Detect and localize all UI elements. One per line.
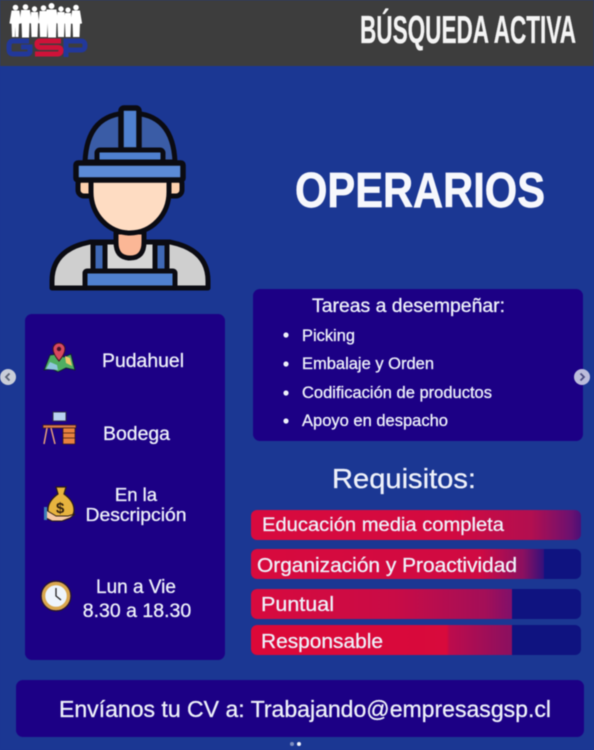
chart: requirement bars	[251, 510, 581, 655]
worker neck	[116, 232, 144, 258]
title: operarios: OPERARIOS	[295, 164, 545, 218]
bar: responsable: Responsable	[261, 631, 383, 653]
icon: money bag: $	[56, 500, 65, 517]
bar: organización	[251, 549, 581, 579]
logo letter S	[35, 41, 61, 54]
helmet dome	[85, 113, 175, 162]
text: schedule	[83, 577, 191, 622]
panel: details	[25, 314, 225, 660]
bar: puntual: Puntual	[261, 593, 334, 616]
icon: map pin	[44, 343, 75, 372]
bar: organización: Organización y Proactividad	[257, 555, 517, 577]
text: workplace: Bodega	[103, 424, 170, 445]
bar: responsable	[251, 625, 581, 655]
icon: clock	[41, 581, 71, 611]
text: location: Pudahuel	[102, 351, 184, 372]
helmet band	[97, 150, 163, 162]
tasks list	[283, 327, 492, 430]
bar: puntual	[251, 589, 581, 619]
heading: requisitos: Requisitos:	[332, 463, 476, 494]
helmet brim	[76, 163, 183, 180]
text: schedule: 8.30 a 18.30	[83, 600, 191, 622]
tasks list: Picking	[302, 327, 355, 345]
tasks list: Embalaje y Orden	[302, 355, 434, 373]
carousel arrow: left	[0, 369, 16, 385]
header bar	[0, 0, 594, 66]
logo letter P	[66, 41, 85, 57]
logo letter G	[9, 41, 30, 54]
carousel arrow: right	[574, 369, 590, 385]
helmet ridge	[121, 108, 139, 150]
worker face	[91, 178, 169, 233]
text: salary	[86, 484, 186, 525]
text: schedule: Lun a Vie	[96, 577, 176, 598]
tasks heading: Tareas a desempeñar:	[312, 296, 505, 317]
worker body	[52, 242, 208, 288]
text: salary: Descripción	[86, 504, 186, 525]
logo: people silhouettes	[10, 4, 82, 37]
tasks list: Codificación de productos	[302, 384, 492, 402]
bar: educación: Educación media completa	[262, 514, 504, 536]
bar: educación	[251, 510, 581, 540]
icon: desk	[43, 412, 76, 444]
logo: GSP	[9, 4, 576, 57]
panel: call to action	[16, 680, 584, 737]
icon: construction worker	[52, 108, 208, 288]
email text: Envíanos tu CV a: Trabajando@empresasgsp.cl	[59, 696, 551, 722]
icon: money bag	[44, 487, 75, 521]
carousel dots	[290, 742, 301, 746]
worker ears	[78, 178, 98, 196]
panel: tasks	[253, 289, 583, 441]
text: salary: En la	[115, 484, 158, 505]
tasks list: Apoyo en despacho	[302, 412, 448, 430]
